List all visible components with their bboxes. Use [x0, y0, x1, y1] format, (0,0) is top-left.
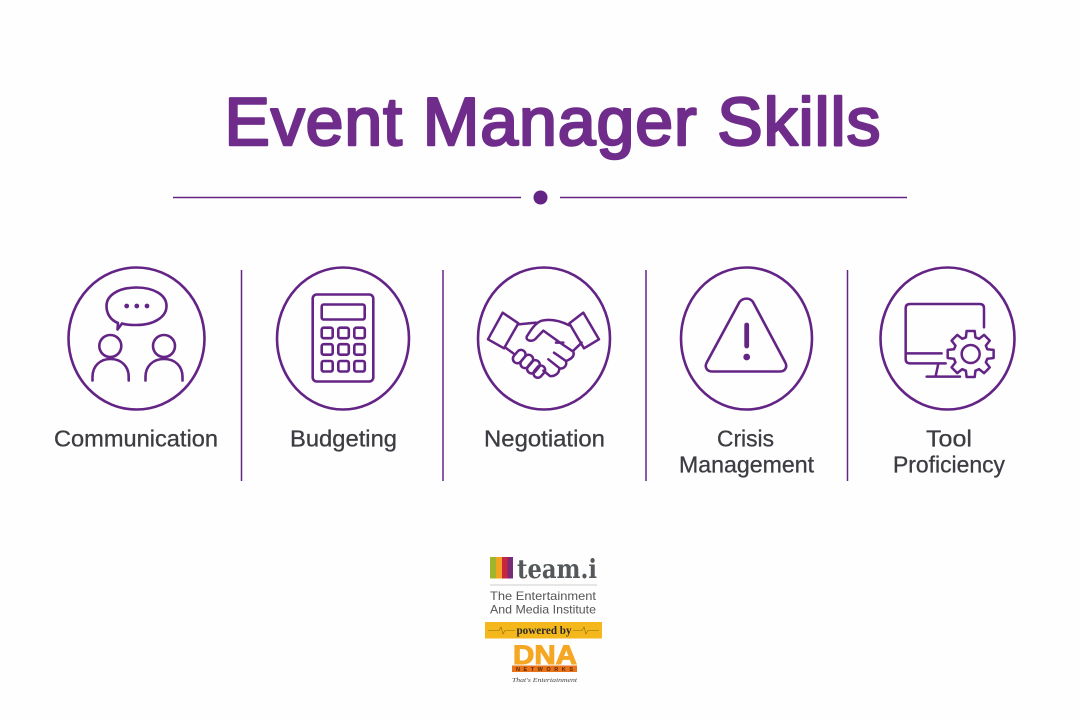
institute name: The Entertainment — [490, 589, 597, 603]
panel: negotiation — [478, 268, 610, 452]
divider 3 — [645, 270, 647, 481]
logo mark: colored stripes — [490, 557, 513, 578]
label: tool proficiency: Tool — [926, 426, 972, 452]
DNA logo: NETWORKS — [516, 667, 573, 673]
label: crisis management — [679, 426, 815, 478]
panel: crisis management — [679, 268, 815, 478]
label: tool proficiency: Proficiency — [893, 452, 1005, 478]
label: negotiation: Negotiation — [484, 426, 605, 452]
icon: warning triangle — [681, 268, 812, 410]
DNA logo: DNA — [513, 640, 577, 670]
title divider with dot — [173, 190, 907, 204]
divider 1 — [240, 270, 242, 481]
logo wordmark: team.i — [517, 555, 597, 585]
icon: handshake — [478, 268, 610, 410]
divider 4 — [846, 270, 848, 481]
panel: tool proficiency — [880, 268, 1014, 478]
panel: communication — [54, 268, 218, 452]
label: crisis management: Crisis — [717, 426, 774, 452]
icon: two people talking — [68, 268, 204, 410]
icon: calculator — [277, 268, 409, 410]
label: tool proficiency — [893, 426, 1005, 478]
logo: team.i powered by DNA — [485, 555, 602, 684]
icon: monitor with gear — [880, 268, 1014, 410]
label: budgeting: Budgeting — [290, 426, 397, 452]
label: communication: Communication — [54, 426, 218, 452]
title: Event Manager Skills — [224, 84, 880, 160]
label: crisis management: Management — [679, 452, 815, 478]
tagline: That's Entertainment — [512, 677, 577, 684]
institute name: And Media Institute — [490, 602, 596, 616]
institute name — [490, 589, 597, 616]
panel: budgeting — [277, 268, 409, 452]
divider 2 — [442, 270, 444, 481]
powered by banner: powered by — [516, 623, 572, 637]
